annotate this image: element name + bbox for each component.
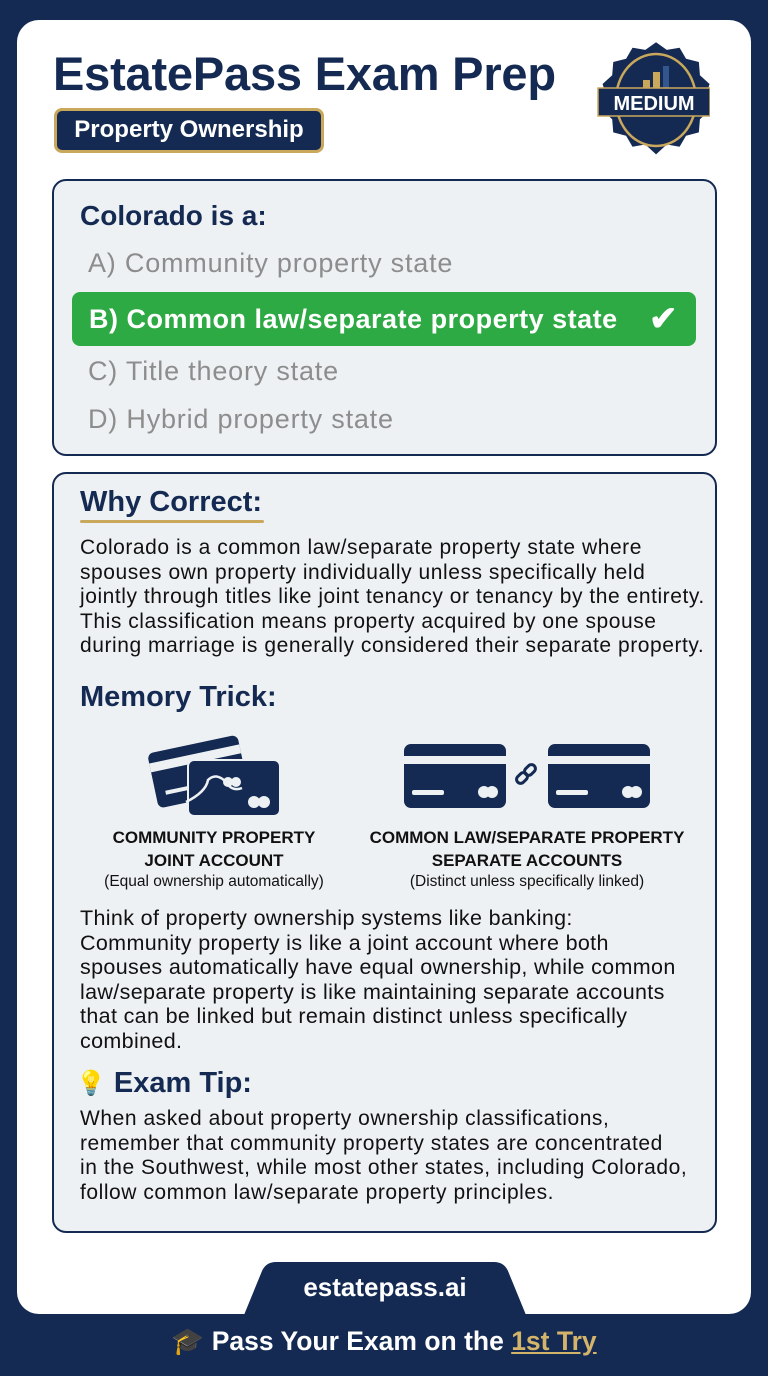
- text: memory trick: law/separate property is like maintaining separate accounts: [80, 980, 665, 1004]
- text: memory trick: that can be linked but remain distinct unless specifically: [80, 1004, 627, 1028]
- text: exam tip: in the Southwest, while most other states, including Colorado,: [80, 1156, 687, 1179]
- text: memory trick: Community property is like a joint account where both: [80, 930, 609, 954]
- text: why correct: jointly through titles like joint tenancy or tenancy by the entirety.: [80, 585, 705, 608]
- category tag: [54, 108, 324, 153]
- label: separate property: [370, 828, 684, 890]
- label: separate property: COMMON LAW/SEPARATE PROPERTY: [370, 828, 684, 847]
- heading: memory trick: Memory Trick:: [80, 681, 277, 713]
- text: memory trick: [80, 906, 676, 1052]
- text: memory trick: Think of property ownership systems like banking:: [80, 906, 573, 930]
- text: exam tip: When asked about property ownership classifications,: [80, 1107, 609, 1130]
- heading: exam tip: Exam Tip:: [114, 1067, 252, 1099]
- panel: explanation: [52, 472, 717, 1233]
- title: EstatePass Exam Prep: [53, 47, 556, 100]
- label: community property: JOINT ACCOUNT: [144, 851, 284, 870]
- question text: Colorado is a:: [80, 200, 267, 231]
- text: exam tip: remember that community property states are concentrated: [80, 1132, 663, 1154]
- label: community property: COMMUNITY PROPERTY: [113, 828, 315, 847]
- text: memory trick: spouses automatically have equal ownership, while common: [80, 955, 676, 979]
- footer tab: [244, 1262, 526, 1314]
- option D: D) Hybrid property state: [88, 404, 394, 434]
- footer url: estatepass.ai: [303, 1272, 467, 1302]
- text: why correct: during marriage is generally considered their separate property.: [80, 634, 704, 657]
- heading: why correct: Why Correct:: [80, 486, 262, 518]
- label: separate property: (Distinct unless specifically linked): [410, 873, 644, 890]
- label: community property: (Equal ownership automatically): [104, 873, 324, 890]
- text: why correct: This classification means property acquired by one spouse: [80, 610, 656, 632]
- text: why correct: [80, 536, 705, 657]
- category tag: Property Ownership: [74, 116, 304, 143]
- text: memory trick: combined.: [80, 1028, 182, 1052]
- option B correct: B) Common law/separate property state: [89, 304, 618, 334]
- badge: medium difficulty: [597, 42, 710, 154]
- label: separate property: SEPARATE ACCOUNTS: [432, 851, 622, 870]
- text: why correct: Colorado is a common law/separate property state where: [80, 536, 642, 559]
- heading: exam tip: 💡: [76, 1070, 106, 1097]
- option B correct: ✔: [649, 300, 678, 338]
- icon: joint account cards: [148, 736, 279, 815]
- icon: linked separate cards: [404, 744, 650, 808]
- option C: C) Title theory state: [88, 356, 339, 386]
- text: exam tip: follow common law/separate property principles.: [80, 1180, 554, 1204]
- option B correct: [72, 292, 696, 346]
- text: why correct: spouses own property individually unless specifically held: [80, 560, 645, 584]
- text: exam tip: [80, 1107, 687, 1204]
- footer tagline: 🎓 Pass Your Exam on the 1st Try: [171, 1326, 597, 1356]
- panel: question: [52, 179, 717, 456]
- option A: A) Community property state: [88, 248, 453, 278]
- label: community property: [104, 828, 324, 890]
- badge: medium difficulty: MEDIUM: [613, 93, 695, 115]
